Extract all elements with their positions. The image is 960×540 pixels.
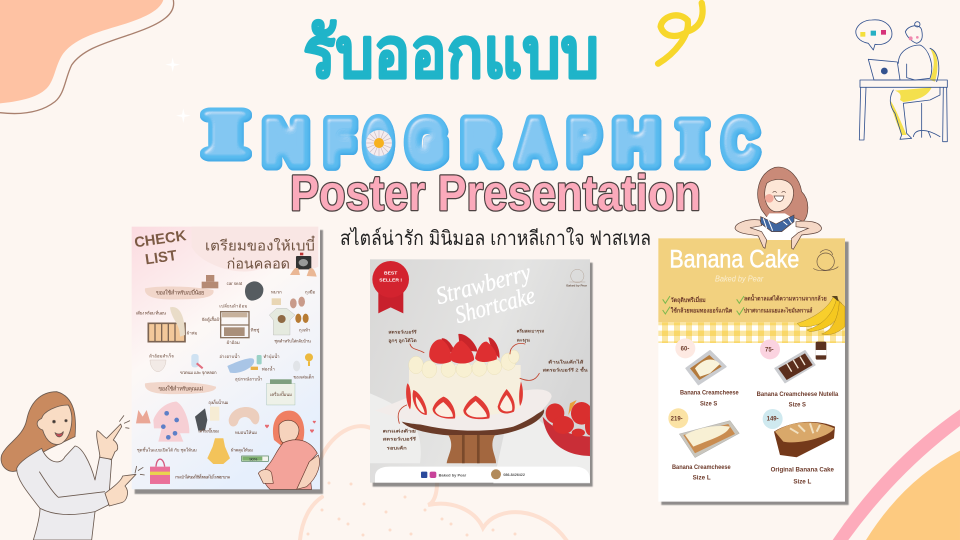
figure bbox=[898, 45, 932, 80]
heading: Baked by Pear bbox=[715, 275, 764, 284]
callouts: สตรอว์เบอร์รี bbox=[383, 436, 417, 442]
callouts: ด้านในเค้กไส้ bbox=[548, 358, 584, 364]
icon: logo face bbox=[813, 250, 838, 271]
icon: breast pump: ถุงเก็บน้ำนม bbox=[208, 398, 229, 406]
icon: baby clothes: ชุดสำหรับใส่กลับบ้าน bbox=[274, 338, 311, 344]
callouts: ครีมสดเบาๆรส bbox=[517, 329, 544, 334]
cake stand bbox=[402, 409, 544, 463]
corner blob top-left bbox=[0, 0, 191, 123]
illustration: person at desk bbox=[856, 20, 947, 142]
contact bar: Baked by Pear bbox=[439, 473, 467, 478]
checklist heading bbox=[133, 228, 315, 271]
icon: nursing pillow: หมอนให้นม bbox=[235, 430, 257, 435]
panel: checklist poster bbox=[132, 227, 323, 494]
item 3: Banana Creamcheese bbox=[672, 464, 731, 471]
benefits: วัตถุดิบพรีเมี่ยม bbox=[671, 295, 706, 304]
heading bbox=[669, 245, 799, 284]
icon: milk box: เครื่องปั๊มนม bbox=[270, 391, 292, 397]
title: Infographic balloon letters: G bbox=[407, 109, 447, 178]
item 2: 75- bbox=[765, 347, 774, 353]
checklist heading: CHECK bbox=[133, 228, 188, 251]
icon: crib: ผ้าห่ม bbox=[187, 331, 197, 336]
icon: daisy in letter O bbox=[366, 130, 392, 156]
tagline: สไตล์น่ารัก มินิมอล เกาหลีเกาใจ ฟาสเทล bbox=[340, 227, 651, 250]
section pill baby: ของใช้สำหรับเบบี๋น้อย bbox=[156, 288, 204, 297]
icon: changing table bbox=[202, 303, 259, 345]
callouts: รอบเค้ก bbox=[387, 444, 407, 450]
subtitle: Poster Presentation: Poster Presentation bbox=[290, 165, 701, 221]
item 2 bbox=[757, 339, 839, 408]
cake plate bbox=[375, 389, 552, 431]
badge: SELLER ! bbox=[379, 278, 402, 284]
item 2: Size S bbox=[789, 401, 806, 408]
title: Infographic balloon letters: P bbox=[568, 109, 600, 178]
icon: ultrasound tablet bbox=[290, 253, 317, 277]
strawberry bowl bbox=[543, 400, 595, 456]
icon: baby clothes: ถุงเท้า bbox=[299, 328, 311, 334]
title: Infographic balloon letters: O bbox=[364, 109, 393, 178]
title: Infographic balloon letters: I bbox=[679, 110, 706, 178]
icon: baby bathtub: อ่างอาบน้ำ bbox=[219, 353, 240, 359]
item 4 bbox=[763, 409, 835, 486]
title: Infographic balloon letters: R bbox=[462, 109, 500, 178]
title: Infographic balloon letters: H bbox=[614, 109, 659, 178]
icon: baby bathtub: อุปกรณ์อาบน้ำ bbox=[235, 376, 263, 383]
icon: changing table: จัดตู้เสื้อผ้า bbox=[202, 316, 222, 323]
panel: banana cake poster bbox=[658, 167, 849, 505]
icon: changing table: ผ้าอ้อม bbox=[227, 340, 240, 345]
benefits: ปราศจากนมเนยและไขมันทรานส์ bbox=[744, 306, 813, 314]
logo: Baked by Pear bbox=[566, 284, 588, 288]
section pill mom: ของใช้สำหรับคุณแม่ bbox=[158, 386, 204, 393]
hearts bbox=[265, 421, 316, 433]
icon: car seat: car seat bbox=[227, 281, 243, 286]
icon: baby clothes: หมวก bbox=[271, 289, 282, 294]
title: Infographic balloon letters: F bbox=[325, 109, 355, 178]
item 4: Size L bbox=[793, 479, 811, 486]
icon: baby clothes: ถุงมือ bbox=[305, 289, 316, 295]
icon: rattles bbox=[293, 353, 314, 379]
icon: apron: ผ้าคลุมให้นม bbox=[231, 447, 253, 453]
callouts: สตรอว์เบอร์รี 2 ชั้น bbox=[543, 366, 588, 373]
icon: nursing pillow bbox=[229, 407, 259, 435]
icon: battery: 90% bbox=[249, 456, 258, 461]
icon: baby bathtub: ทำบุ๋มน้ำ bbox=[263, 353, 280, 360]
title: Infographic balloon letters: A bbox=[517, 109, 554, 178]
callouts bbox=[383, 328, 588, 450]
script title: Shortcake bbox=[452, 282, 538, 329]
logo bbox=[566, 269, 588, 288]
icon: blocks bbox=[202, 275, 218, 288]
illustration: girl pointing bbox=[735, 167, 822, 249]
icon: milk box bbox=[267, 379, 295, 405]
icon: diaper and bottle: ขวดนม และ จุกหลอก bbox=[180, 370, 217, 376]
benefits: ใช้กล้วยหอมทองออร์แกนิค bbox=[671, 306, 732, 314]
icon: breast pump bbox=[195, 398, 229, 434]
callouts: ลูกๆ ลูกโต้โต bbox=[388, 337, 417, 344]
contact bar: 086-8426422 bbox=[503, 473, 525, 477]
icon: apron bbox=[207, 438, 253, 464]
callouts: ตกแต่งด้วย bbox=[383, 428, 417, 434]
callouts: สตรอว์เบอร์รี bbox=[388, 328, 417, 334]
laptop bbox=[868, 59, 900, 80]
badge: BEST bbox=[384, 271, 397, 277]
icon: baby bathtub bbox=[219, 353, 280, 383]
icon: bananas bbox=[797, 296, 845, 335]
section pill baby bbox=[145, 287, 214, 299]
item 2: Banana Creamcheese Nutella bbox=[757, 391, 839, 398]
illustration: woman pointing at poster bbox=[1, 392, 145, 540]
icon: baby clothes bbox=[269, 289, 316, 344]
icon: crib bbox=[136, 307, 197, 342]
icon: bra and robe bbox=[136, 402, 197, 454]
decorative dots bbox=[306, 482, 516, 536]
item 4: Original Banana Cake bbox=[771, 466, 834, 473]
icon: car seat bbox=[227, 281, 263, 301]
item 3: Size L bbox=[693, 474, 711, 481]
title: Infographic balloon letters bbox=[207, 101, 758, 178]
item 1: 60- bbox=[681, 347, 689, 353]
script title: Strawberry bbox=[433, 259, 534, 310]
icon: diaper and bottle: ผ้าอ้อมสำเร็จ bbox=[149, 351, 174, 358]
icon: crib: เตียง พร้อม ที่นอน bbox=[136, 309, 166, 315]
icon: diaper and bottle bbox=[149, 351, 217, 376]
cake bbox=[406, 334, 523, 419]
item 1: Banana Creamcheese bbox=[680, 390, 739, 397]
heading: Banana Cake bbox=[669, 245, 799, 273]
title: Infographic balloon letters: N bbox=[264, 109, 308, 178]
icon: breast pump: เครื่องปั๊มนม bbox=[198, 428, 219, 434]
icon: battery bbox=[242, 456, 268, 461]
icon: rattles: ของเล่นเด็ก bbox=[293, 372, 314, 379]
contact bar bbox=[375, 467, 590, 483]
icon: changing table: ทิชชู่ bbox=[251, 328, 259, 334]
corner stripes bottom-right bbox=[833, 409, 960, 540]
section pill mom bbox=[145, 382, 216, 394]
item 1 bbox=[675, 338, 739, 408]
item 1: Size S bbox=[700, 401, 717, 408]
desk bbox=[859, 80, 947, 142]
speech bubble bbox=[856, 20, 892, 50]
item 3: 219- bbox=[671, 417, 683, 423]
benefits bbox=[663, 292, 827, 315]
icon: bra and robe: ชุดชั้นในแบบเปิดได้ กับ ชุดให้นม bbox=[137, 447, 197, 454]
title: Infographic balloon letters: C bbox=[723, 109, 758, 178]
decorative cloud outline bbox=[300, 426, 567, 540]
title: Thai heading: รับออกแบบ bbox=[303, 14, 599, 92]
yellow squiggle bbox=[658, 3, 703, 64]
icon: changing table: เปลี่ยนผ้าอ้อม bbox=[219, 303, 247, 309]
icon: baby bathtub: ฟองน้ำ bbox=[262, 366, 275, 372]
illustration: pregnant woman bbox=[258, 411, 320, 489]
panel: strawberry shortcake poster bbox=[370, 259, 595, 487]
title: Infographic balloon letters: I bbox=[207, 101, 245, 169]
icon: hospital bag bbox=[150, 459, 230, 484]
checklist heading: ก่อนคลอด bbox=[227, 255, 290, 271]
checklist heading: เตรียมของให้เบบี๋ bbox=[205, 236, 315, 254]
yellow accents bbox=[890, 48, 938, 135]
badge bbox=[372, 261, 409, 313]
benefits: ลดน้ำตาลแต่ได้ความหวานจากกล้วย bbox=[744, 292, 827, 302]
item 3 bbox=[668, 408, 739, 481]
icon: hospital bag: กระเป๋าใส่ของใช้ทั้งหมดไปโรงพยาบาล bbox=[175, 473, 230, 479]
item 4: 149- bbox=[767, 417, 779, 423]
callouts: ละมุน bbox=[517, 337, 530, 343]
script title bbox=[433, 259, 540, 333]
checklist heading: LIST bbox=[144, 248, 178, 268]
